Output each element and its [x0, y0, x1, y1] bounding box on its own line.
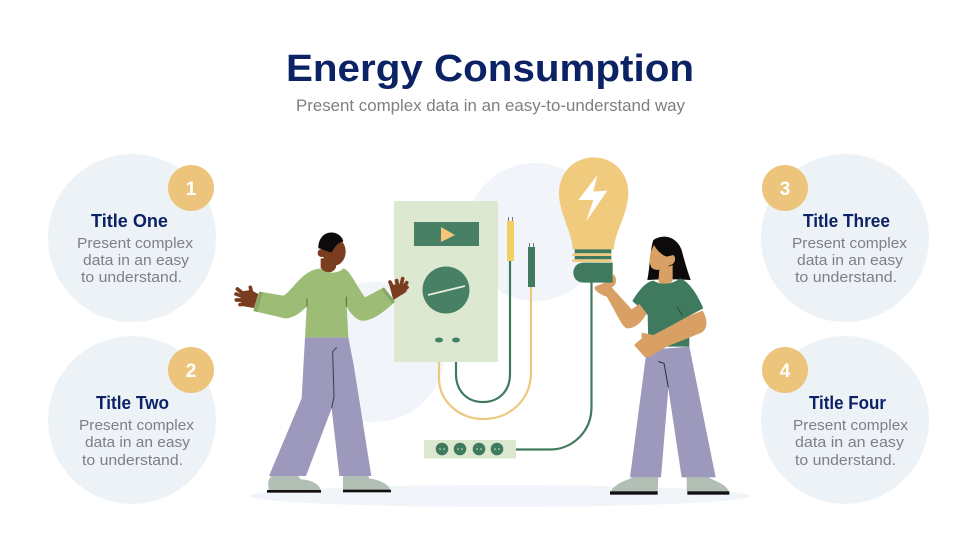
background blobs	[305, 163, 604, 422]
ground shadow	[250, 485, 750, 507]
panel: title four: Present complex	[793, 417, 909, 434]
panel: title two: data in an easy	[85, 434, 191, 451]
panel: title one: data in an easy	[83, 252, 190, 269]
panel: title three	[761, 154, 929, 322]
subtitle: Present complex data in an easy-to-understand way	[296, 97, 686, 115]
panel: title four: data in an easy	[795, 434, 905, 451]
panel: title four: Title Four	[809, 392, 886, 413]
panel: title one: Title One	[91, 210, 168, 231]
power strip	[424, 440, 516, 458]
panel: title three: Title Three	[803, 210, 890, 231]
panel: title one: Present complex	[77, 235, 194, 252]
panel: title four: 4	[780, 361, 791, 382]
panel: title three: 3	[780, 179, 790, 200]
power cable	[516, 282, 592, 450]
panel: title four	[761, 336, 929, 504]
panel: title four: to understand.	[795, 452, 896, 469]
woman figure	[594, 237, 729, 495]
panel: title two	[48, 336, 216, 504]
panel: title three: Present complex	[792, 235, 908, 252]
panel: title two: Title Two	[96, 392, 169, 413]
panel: title three: to understand.	[795, 269, 897, 286]
panel: title two: Present complex	[79, 417, 195, 434]
test leads	[439, 260, 531, 419]
panel: title two: to understand.	[82, 452, 183, 469]
man figure	[236, 233, 407, 493]
multimeter	[394, 201, 498, 362]
yellow probe	[507, 217, 514, 261]
light bulb	[559, 157, 628, 283]
panel: title three: data in an easy	[797, 252, 904, 269]
green probe	[528, 243, 535, 287]
panel: title two: 2	[186, 361, 196, 382]
panel: title one: 1	[186, 179, 197, 200]
panel: title one	[48, 154, 216, 322]
title: Energy Consumption	[286, 48, 694, 90]
panel: title one: to understand.	[81, 269, 182, 286]
